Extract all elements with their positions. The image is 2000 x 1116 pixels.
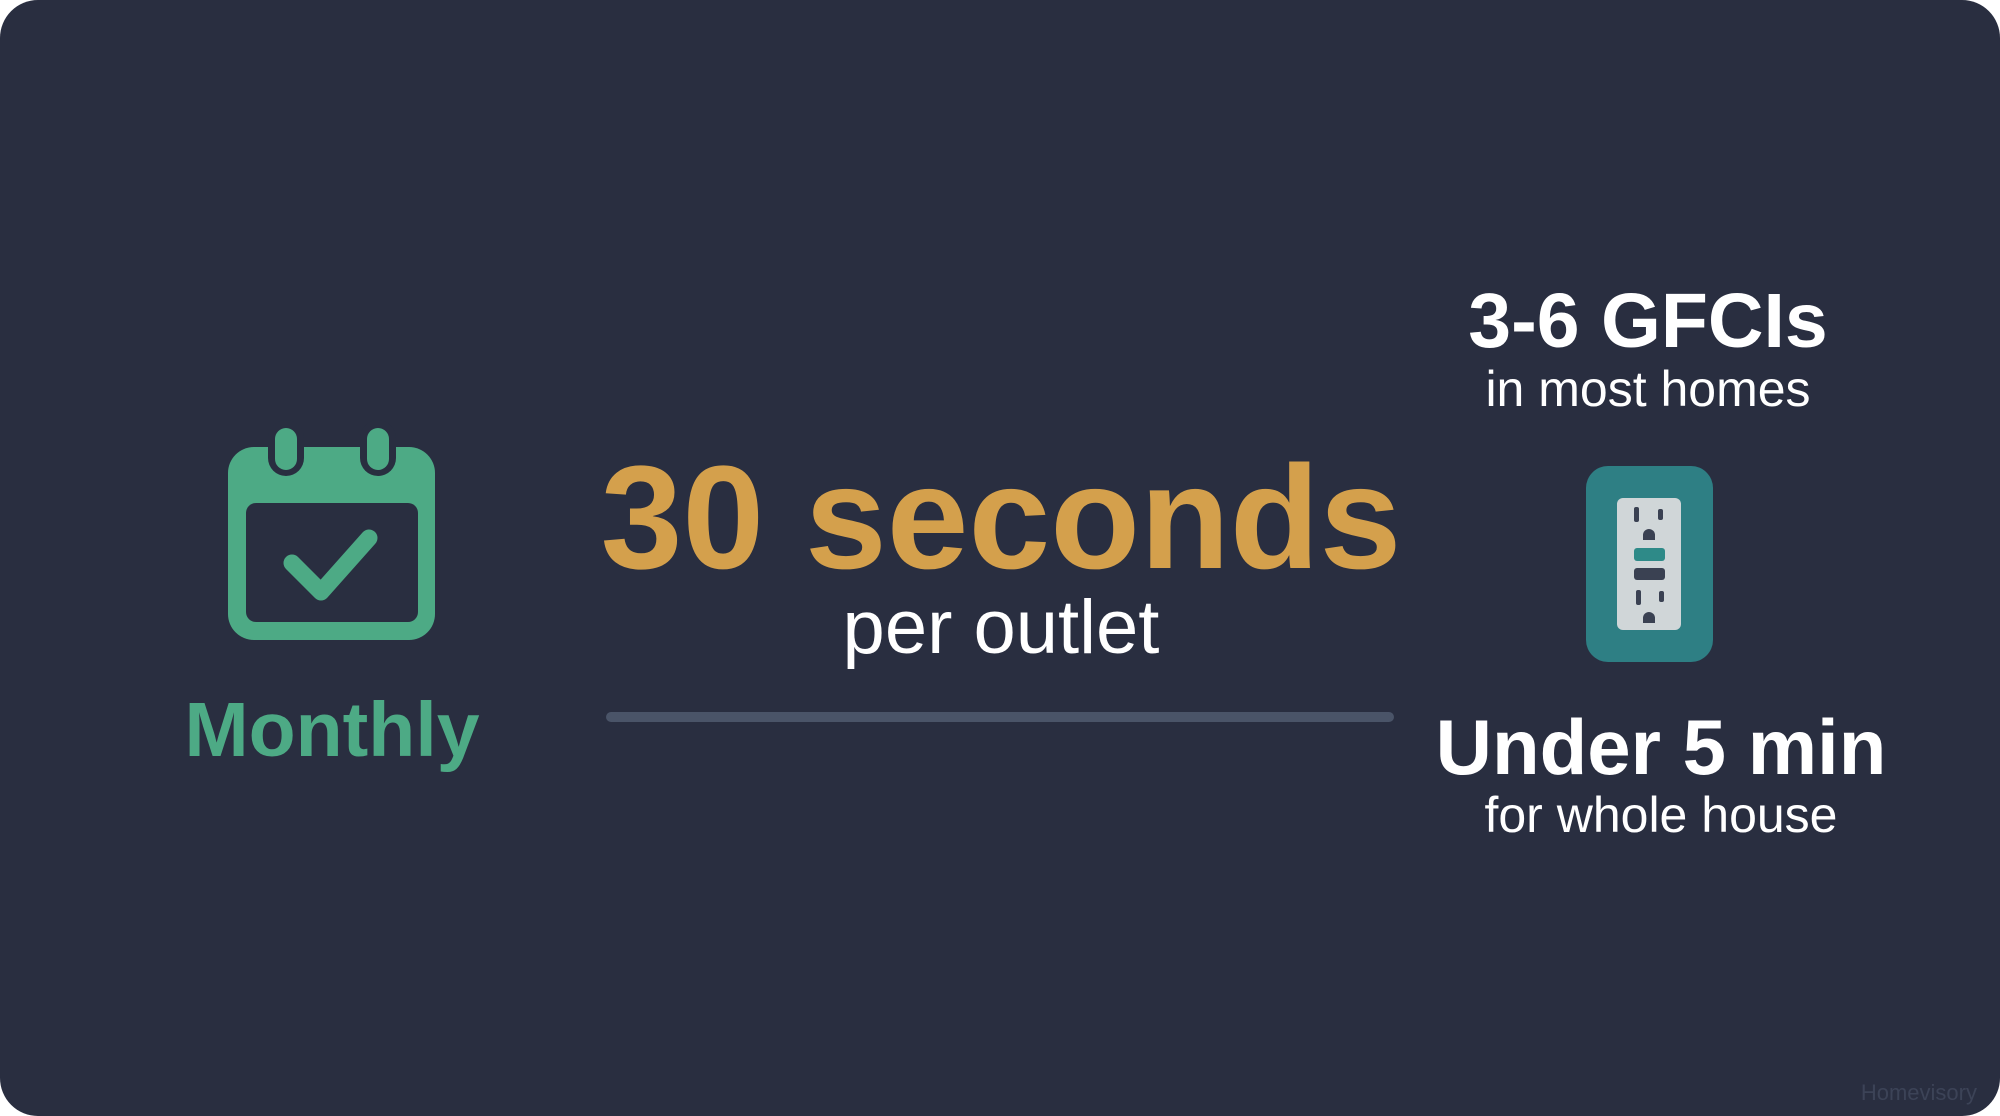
divider bar: [606, 712, 1394, 722]
stat: 3-6 GFCIs: in most homes: [1485, 361, 1811, 417]
icon: calendar with check: [228, 420, 435, 640]
headline: 30 seconds: 30 seconds: [601, 436, 1401, 600]
stat: 3-6 GFCIs: 3-6 GFCIs: [1468, 278, 1828, 364]
stat: 3-6 GFCIs: [1468, 278, 1828, 417]
subtext: per outlet: per outlet: [843, 585, 1159, 670]
icon: GFCI outlet: [1586, 466, 1713, 662]
label: Monthly: Monthly: [184, 687, 480, 773]
stat: Under 5 min: Under 5 min: [1436, 703, 1886, 791]
watermark: Homevisory: [1861, 1080, 1977, 1105]
stat: Under 5 min: for whole house: [1484, 787, 1838, 843]
stat: Under 5 min: [1436, 703, 1886, 843]
